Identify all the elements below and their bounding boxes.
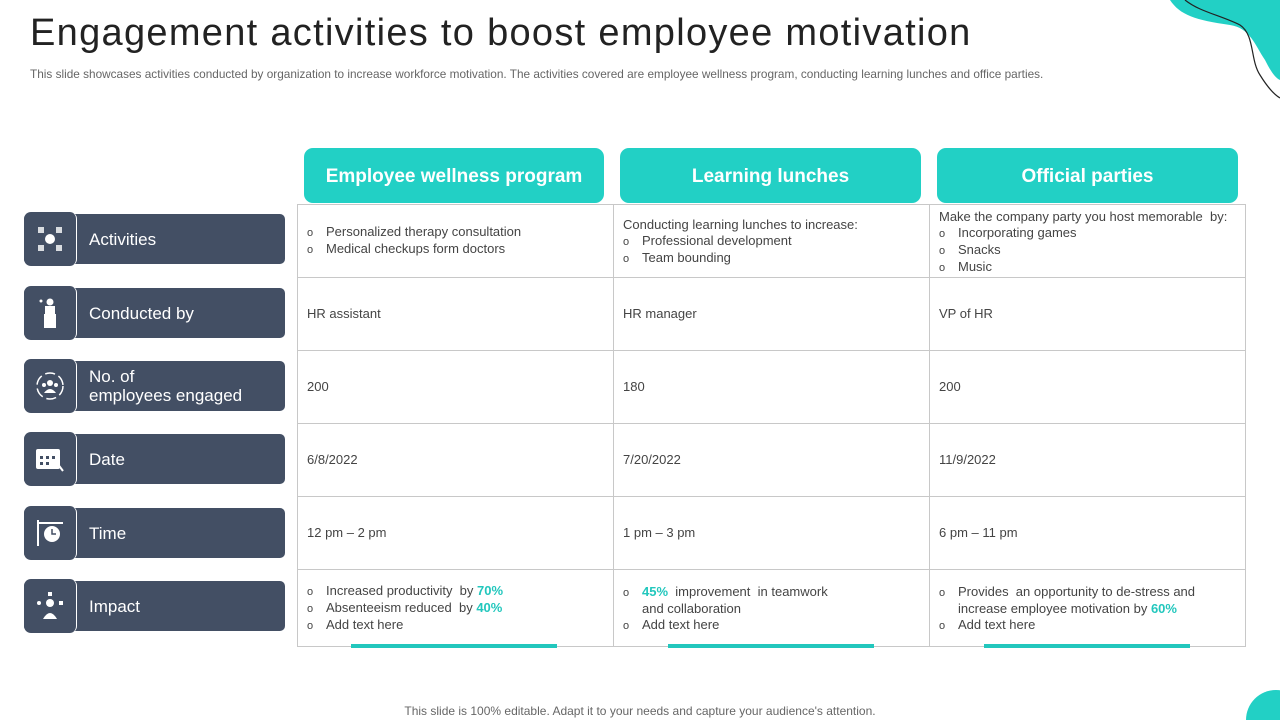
header: Employee wellness program: Employee wellness program (326, 166, 582, 187)
table: Incorporating games (958, 225, 1077, 240)
subtitle: This slide showcases activities conducted by organization to increase workforce motivation. The activities covered are employee wellness program, conducting learning lunches and office parties. (30, 67, 1043, 81)
table: and collaboration (642, 601, 741, 616)
label: Date: Date (89, 450, 125, 468)
table: Medical checkups form doctors (326, 241, 505, 256)
table: 1 pm – 3 pm (623, 525, 695, 540)
decoration: bottom-right circle (1246, 690, 1280, 720)
label: Impact (24, 581, 285, 631)
footer: This slide is 100% editable. Adapt it to your needs and capture your audience's attention. (404, 704, 876, 718)
accent bars (351, 644, 557, 648)
label: No. of employees engaged: employees engaged (89, 386, 242, 405)
table: Provides an opportunity to de-stress and (958, 584, 1195, 599)
table: Absenteeism reduced by 40% (326, 600, 502, 614)
label: No. of employees engaged (24, 361, 285, 411)
label: Conducted by (24, 288, 285, 338)
table: HR assistant (307, 306, 381, 321)
decoration: top-right blob (1170, 0, 1280, 98)
header: Learning lunches (620, 148, 921, 203)
table: Music (958, 259, 992, 274)
title: Engagement activities to boost employee motivation (30, 12, 972, 54)
label: Impact: Impact (89, 596, 140, 616)
label: No. of employees engaged: No. of (89, 367, 134, 386)
label: Time (24, 508, 285, 558)
table: Team bounding (642, 250, 731, 265)
table: 6 pm – 11 pm (939, 525, 1018, 540)
label: Date (24, 434, 285, 484)
table: 11/9/2022 (939, 452, 996, 467)
table: 6/8/2022 (307, 452, 358, 467)
table: Make the company party you host memorable by: (939, 209, 1227, 224)
table: 200 (307, 379, 329, 394)
label: Activities (24, 214, 285, 264)
table: Add text here (326, 616, 403, 632)
table: Add text here (958, 617, 1035, 632)
label: Activities: Activities (89, 230, 156, 248)
table: Add text here (642, 617, 719, 632)
table: Snacks (958, 242, 1001, 257)
table: Professional development (642, 233, 792, 248)
table: Personalized therapy consultation (326, 224, 521, 239)
header: Official parties: Official parties (1022, 166, 1154, 187)
table: 12 pm – 2 pm (307, 525, 386, 540)
header: Learning lunches: Learning lunches (692, 166, 849, 187)
table: Increased productivity by 70% (326, 582, 503, 598)
table: HR manager (623, 306, 697, 321)
table: Conducting learning lunches to increase: (623, 217, 858, 232)
label: Time: Time (89, 524, 126, 542)
table: 180 (623, 379, 645, 394)
label: Conducted by: Conducted by (89, 304, 194, 322)
table: 7/20/2022 (623, 452, 681, 467)
table: VP of HR (939, 306, 993, 321)
header: Employee wellness program (304, 148, 604, 203)
table (297, 204, 1246, 647)
header: Official parties (937, 148, 1238, 203)
table: 200 (939, 379, 961, 394)
table: 45% improvement in teamwork (642, 584, 828, 599)
table: increase employee motivation by 60% (958, 601, 1177, 616)
